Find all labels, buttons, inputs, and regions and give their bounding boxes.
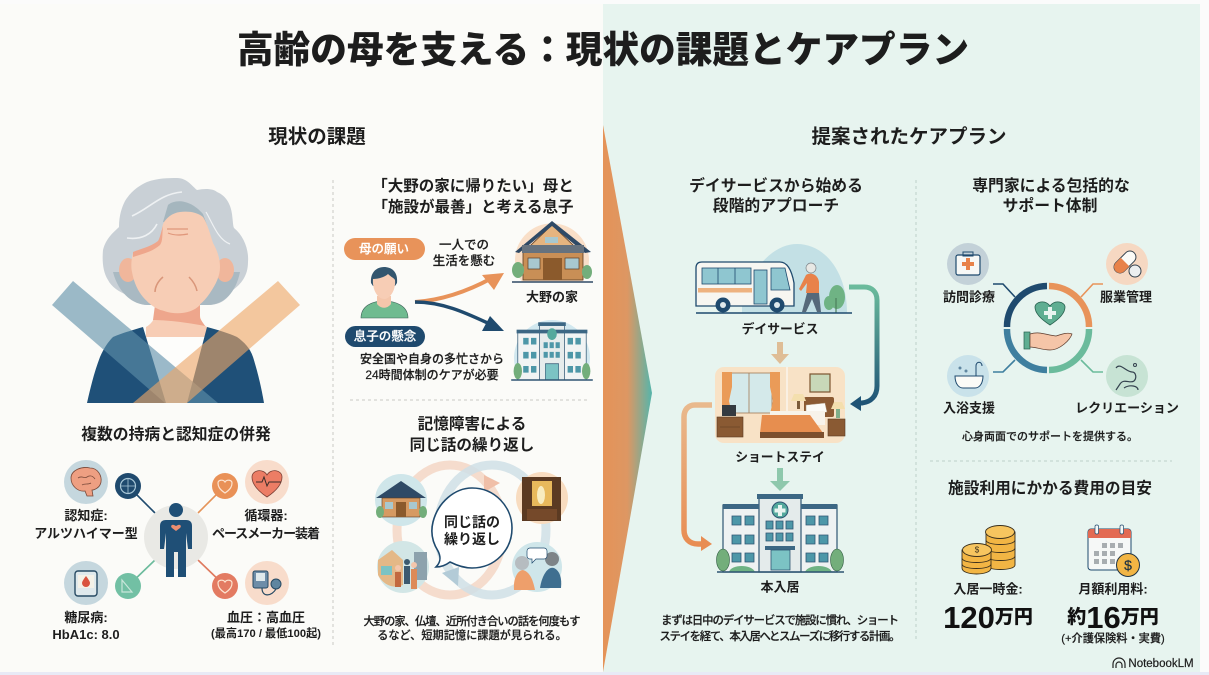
icon: walking person — [799, 263, 821, 312]
label: diabetes: HbA1c: 8.0 — [52, 626, 120, 642]
heading: comprehensive support: 専門家による包括的な — [972, 176, 1130, 194]
icon: day service bus — [696, 244, 852, 313]
ring: four-part support — [1007, 286, 1089, 370]
diagram: repeating stories cycle — [364, 465, 580, 642]
note: extra costs: (+介護保険料・実費) — [1061, 631, 1165, 645]
pill: mother's wish — [344, 238, 425, 260]
label: circulatory: 循環器: — [244, 508, 288, 522]
heading: proposed care plan: 提案されたケアプラン — [811, 126, 1007, 148]
label: home visit care: 訪問診療 — [943, 290, 995, 304]
heading: comorbidities: 複数の持病と認知症の併発 — [81, 424, 271, 444]
diagram: stepwise care flow — [660, 244, 900, 643]
icon: heart — [212, 460, 289, 504]
text: struggling to live alone: 一人での — [439, 238, 489, 252]
label: dementia: アルツハイマー型 — [34, 526, 138, 540]
icon: conversation — [512, 542, 562, 592]
icon: bath — [947, 355, 989, 397]
label: short stay: ショートステイ — [735, 450, 825, 464]
heading: stepwise approach: 段階的アプローチ — [713, 196, 839, 214]
panel: costs — [943, 525, 1165, 645]
arrow: orange to home — [415, 273, 504, 302]
diagram: mother's wish and son's concern — [344, 221, 593, 382]
arrow: short stay to admission — [684, 405, 712, 551]
label: bathing support: 入浴支援 — [943, 400, 995, 416]
label: dementia: 認知症: — [64, 508, 108, 522]
icon: home visit medical kit — [947, 243, 989, 285]
speech bubble: 繰り返し — [444, 531, 500, 547]
illustration: elderly mother with crossed bars — [52, 178, 300, 403]
logo: NotebookLM: NotebookLM — [1128, 658, 1194, 670]
heading: mother and son conflict: 「施設が最善」と考える息子 — [372, 196, 574, 216]
arrow: day service to admission side — [849, 287, 877, 411]
arrow: day service to short stay — [771, 342, 789, 364]
icon: glucose meter — [64, 561, 141, 605]
icon: son — [361, 267, 408, 318]
label: recreation: レクリエーション — [1075, 400, 1179, 416]
icon: human body — [160, 503, 192, 577]
number: 1.2 million yen: 120万円 — [943, 600, 1033, 634]
label: monthly fee: 月額利用料: — [1078, 582, 1148, 596]
label: entrance fee: 入居一時金: — [953, 582, 1023, 596]
panel: left background — [0, 4, 603, 672]
icon: medication — [1106, 243, 1148, 285]
icon: coins: $ — [975, 546, 980, 554]
icon: house — [375, 474, 427, 526]
icon: brain — [64, 460, 141, 504]
text: reason for 24 hour care: 安全国や自身の多忙さから — [360, 351, 504, 366]
text: plan description: ステイを経て、本入居へとスムーズに移行する計画。 — [660, 629, 900, 643]
label: blood pressure: (最高170 / 最低100起) — [211, 626, 321, 640]
icon: heart in hand — [1024, 302, 1072, 350]
arrow: short stay to full admission — [770, 468, 790, 491]
label: diabetes: 糖尿病: — [64, 610, 108, 624]
number: about 160 thousand yen: 約16万円 — [1067, 600, 1159, 634]
heading: repetition by memory impairment: 同じ話の繰り返し — [410, 436, 534, 454]
label: blood pressure: 血圧：高血圧 — [227, 610, 305, 624]
diagram: comprehensive support — [943, 243, 1179, 443]
icon: recreation — [1106, 355, 1148, 397]
diagram: comorbidities around body — [34, 460, 321, 642]
icon: coins — [962, 526, 1015, 574]
arrow: navy to facility — [415, 302, 504, 331]
pill: mother's wish: 母の願い — [359, 242, 409, 256]
label: medication management: 服業管理 — [1100, 290, 1152, 304]
label: circulatory: ペースメーカー装着 — [212, 526, 320, 540]
label: day service: デイサービス — [742, 322, 818, 336]
title: 高齢の母を支える：現状の課題とケアプラン — [237, 30, 969, 70]
pill: son's concern: 息子の懸念 — [354, 328, 417, 344]
speech bubble — [432, 488, 512, 568]
heading: facility costs: 施設利用にかかる費用の目安 — [948, 478, 1152, 498]
icon: calendar with coin — [1088, 525, 1140, 576]
icon: tree — [824, 285, 845, 313]
panel: right background — [603, 4, 1200, 672]
icon: neighbourhood — [377, 541, 429, 593]
text: memory description: 大野の家、仏壇、近所付き合いの話を何度もす — [364, 614, 580, 628]
text: struggling to live alone: 生活を懸む — [433, 254, 495, 268]
icon: facility building — [716, 494, 844, 572]
illustration: short stay room — [715, 367, 845, 443]
heading: mother and son conflict: 「大野の家に帰りたい」母と — [372, 176, 574, 194]
text: reason for 24 hour care: 24時間体制のケアが必要 — [365, 367, 499, 382]
text: physical and mental support: 心身両面でのサポートを提供する。 — [962, 429, 1138, 443]
heading: stepwise approach: デイサービスから始める — [689, 176, 863, 194]
heading: current issues: 現状の課題 — [268, 126, 366, 148]
icon: blood pressure monitor — [212, 561, 289, 605]
arrow: transition from issues to plan — [603, 125, 652, 672]
pill: son's concern — [345, 326, 425, 347]
heading: repetition by memory impairment: 記憶障害による — [418, 414, 526, 432]
text: plan description: まずは日中のデイサービスで施設に慣れ、ショート — [661, 613, 899, 627]
icon: calendar with coin: $ — [1124, 557, 1132, 573]
icon: care facility — [511, 320, 593, 380]
label: Ono house: 大野の家 — [526, 290, 578, 304]
text: memory description: るなど、短期記憶に課題が見られる。 — [377, 628, 567, 642]
icon: Ono house — [512, 221, 593, 282]
label: full admission: 本入居 — [760, 580, 800, 594]
speech bubble: 同じ話の — [444, 514, 500, 530]
heading: comprehensive support: サポート体制 — [1003, 196, 1097, 214]
icon: Buddhist altar — [516, 472, 568, 524]
